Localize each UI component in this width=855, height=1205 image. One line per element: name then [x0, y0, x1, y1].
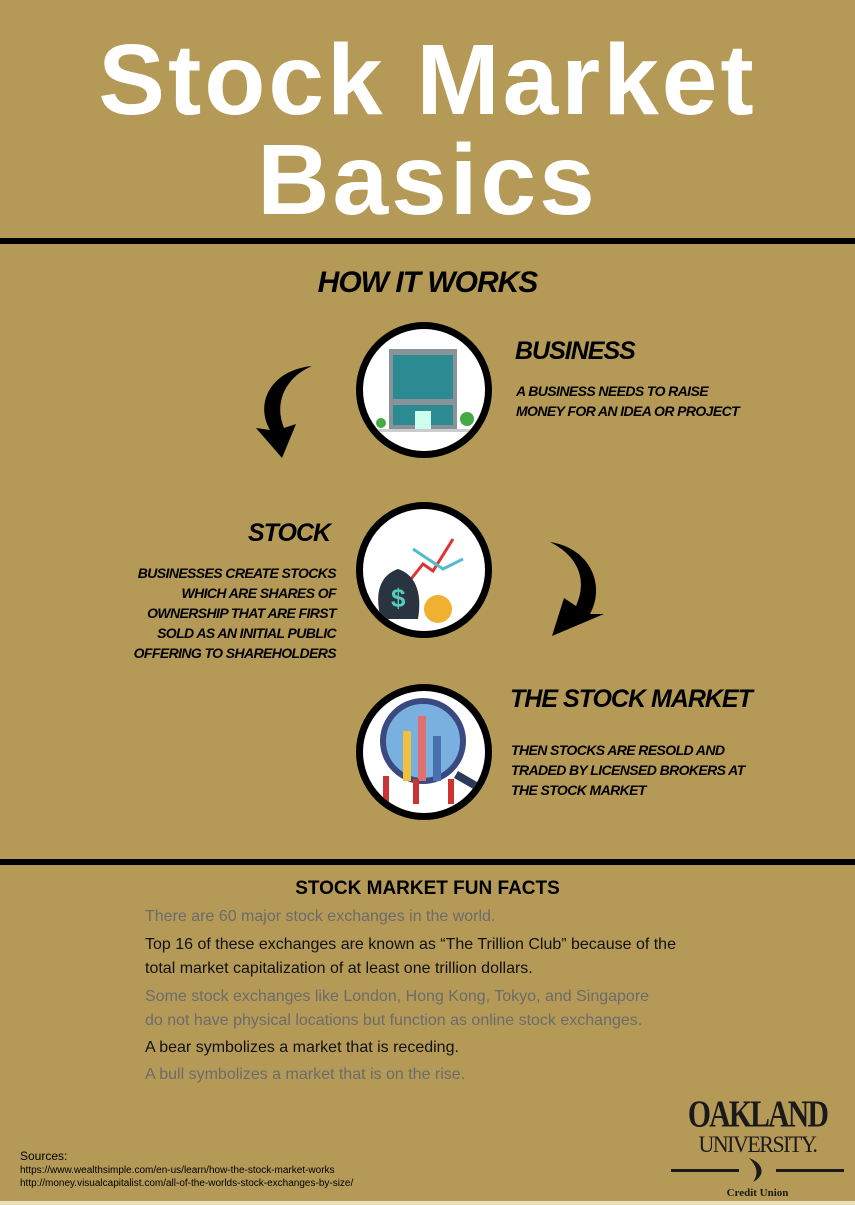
text: stock: BUSINESSES CREATE STOCKS [138, 565, 336, 581]
heading: fun facts: STOCK MARKET FUN FACTS [295, 878, 560, 899]
text: the stock market: THEN STOCKS ARE RESOLD AND [511, 742, 724, 758]
fun facts text: do not have physical locations but function as online stock exchanges. [145, 1012, 642, 1029]
text: stock: WHICH ARE SHARES OF [181, 585, 336, 601]
sources: Sources: [20, 1149, 67, 1163]
heading: the stock market: THE STOCK MARKET [510, 685, 752, 713]
logo: oakland university credit union: UNIVERSITY. [698, 1132, 817, 1157]
text: the stock market: TRADED BY LICENSED BROKERS AT [511, 762, 745, 778]
fun facts text: Some stock exchanges like London, Hong Kong, Tokyo, and Singapore [145, 988, 649, 1005]
sources: http://money.visualcapitalist.com/all-of-the-worlds-stock-exchanges-by-size/ [20, 1178, 353, 1189]
icon: stock circle [356, 502, 492, 638]
text: business: A BUSINESS NEEDS TO RAISE [516, 383, 708, 399]
fun facts text [145, 908, 676, 1083]
heading: stock: STOCK [248, 519, 330, 547]
icon: business circle [356, 322, 492, 458]
title: Basics [257, 124, 598, 236]
text: stock: OWNERSHIP THAT ARE FIRST [147, 605, 336, 621]
fun facts text: There are 60 major stock exchanges in the world. [145, 908, 495, 925]
logo: oakland university credit union: Credit Union [727, 1187, 788, 1199]
icon: stock market circle [356, 684, 492, 820]
logo: oakland university credit union [671, 1094, 844, 1199]
fun facts text: total market capitalization of at least one trillion dollars. [145, 960, 533, 977]
text: business: MONEY FOR AN IDEA OR PROJECT [516, 403, 739, 419]
text: stock: SOLD AS AN INITIAL PUBLIC [157, 625, 336, 641]
text: stock [134, 565, 338, 661]
title: Stock Market [98, 24, 757, 136]
sources: https://www.wealthsimple.com/en-us/learn/how-the-stock-market-works [20, 1165, 335, 1176]
heading: business: BUSINESS [515, 337, 635, 365]
heading: how it works: HOW IT WORKS [318, 266, 537, 299]
arrow: left curved [256, 366, 312, 458]
fun facts text: A bear symbolizes a market that is receding. [145, 1039, 459, 1056]
text: the stock market [511, 742, 746, 798]
fun facts text: Top 16 of these exchanges are known as “The Trillion Club” because of the [145, 936, 676, 953]
icon: stock circle: $ [391, 583, 406, 613]
fun facts text: A bull symbolizes a market that is on the rise. [145, 1066, 465, 1083]
arrow: right curved [550, 542, 604, 636]
text: stock: OFFERING TO SHAREHOLDERS [134, 645, 336, 661]
logo: oakland university credit union: OAKLAND [688, 1094, 827, 1136]
sources [20, 1149, 354, 1189]
text: business [516, 383, 741, 419]
title [98, 24, 757, 236]
text: the stock market: THE STOCK MARKET [511, 782, 646, 798]
